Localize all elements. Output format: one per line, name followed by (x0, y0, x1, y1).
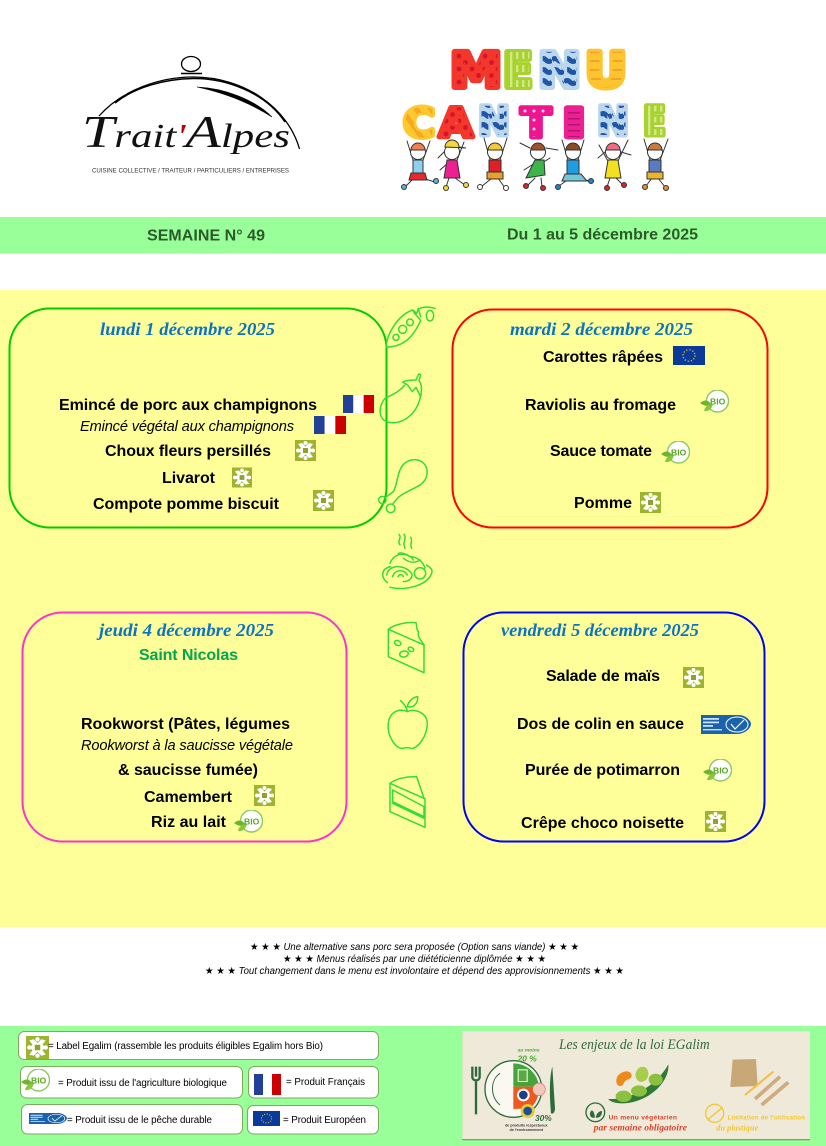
icon: eggplant (380, 374, 421, 423)
logo tagline: CUISINE COLLECTIVE / TRAITEUR / PARTICULIERS / ENTREPRISES (92, 168, 290, 174)
heading: lundi: lundi 1 décembre 2025 (100, 319, 275, 339)
week band (0, 217, 826, 254)
icon: apple (388, 697, 427, 748)
plate chart (472, 1048, 555, 1132)
dish: Livarot: Livarot (162, 470, 216, 487)
icon: Egalim label (313, 490, 334, 511)
icon: Egalim label (254, 785, 275, 806)
footnote lines (205, 942, 624, 977)
dish: saucisse fumée: & saucisse fumée) (118, 762, 258, 779)
plastic limitation illustration: Limitation de l'utilisation (728, 1115, 805, 1121)
dish: Compote: Compote pomme biscuit (93, 496, 280, 513)
legend: sustainable fishing: = Produit issu de le pêche durable (67, 1115, 213, 1126)
icon: cheese (388, 623, 424, 673)
dish: Camembert: Camembert (144, 789, 233, 806)
icon: MSC label (701, 715, 751, 734)
icon: chicken drumstick (379, 460, 427, 513)
dish: Emincé de porc: Emincé de porc aux champignons (59, 397, 317, 414)
dish: Rookworst végétale: Rookworst à la saucisse végétale (81, 738, 293, 754)
legend: bio: BIO (31, 1076, 47, 1086)
icon: spaghetti plate (383, 534, 432, 588)
title letters: MENU: E (503, 43, 533, 99)
title letters: MENU (450, 43, 627, 99)
footnote lines: ★ ★ ★ Tout changement dans le menu est involontaire et dépend des approvisionnements ★ ★ ★ (205, 966, 624, 977)
pea pod illustration: par semaine obligatoire (593, 1122, 687, 1132)
dish: Emincé végétal: Emincé végétal aux champignons (80, 419, 294, 435)
image: menu cantine (402, 43, 668, 190)
icon: bio label: BIO (244, 816, 260, 826)
dish: Dos de colin: Dos de colin en sauce (517, 716, 684, 733)
icon: French flag (314, 416, 346, 434)
image: les enjeux de la loi EGalim (462, 1031, 810, 1140)
plate chart: 20 % (517, 1054, 537, 1064)
logo: Trait'Alpes (82, 56, 300, 174)
yellow menu background (0, 290, 826, 927)
icon: bio label: BIO (710, 396, 726, 406)
title letters: CANTINE: I (562, 101, 586, 147)
icon: bio label: BIO (671, 448, 687, 458)
panel: jeudi (22, 612, 346, 842)
icon: bio label: BIO (713, 766, 729, 776)
plastic limitation illustration (706, 1059, 805, 1132)
legend: Egalim: = Label Egalim (rassemble les produits éligibles Egalim hors Bio) (48, 1041, 323, 1052)
footnote lines: ★ ★ ★ Menus réalisés par une diététicienne diplômée ★ ★ ★ (283, 954, 546, 965)
dish: Crêpe: Crêpe choco noisette (521, 815, 684, 832)
dish: Pomme: Pomme (574, 495, 632, 512)
title letters: MENU: N (538, 43, 581, 99)
image title: Les enjeux de la loi EGalim (558, 1037, 710, 1053)
week dates: Du 1 au 5 décembre 2025 (507, 226, 698, 244)
footnote lines: ★ ★ ★ Une alternative sans porc sera proposée (Option sans viande) ★ ★ ★ (250, 942, 579, 953)
icon: cake slice (390, 777, 425, 827)
icon: Egalim label (640, 492, 661, 513)
title letters: CANTINE: N (478, 99, 510, 145)
bottom legend band (0, 1026, 826, 1146)
icon: Egalim label (295, 440, 316, 461)
plate chart: de l'environnement (510, 1128, 544, 1132)
panel: vendredi (464, 612, 764, 842)
dish: Raviolis: Raviolis au fromage (525, 397, 676, 414)
icon: bio label (661, 441, 690, 463)
plate chart: au moins (518, 1048, 540, 1054)
dish: Purée: Purée de potimarron (525, 762, 680, 779)
dish: Riz au lait: Riz au lait (151, 814, 227, 831)
legend: European product (248, 1106, 378, 1134)
icon: EU flag (673, 346, 705, 365)
dish: Salade: Salade de maïs (546, 668, 660, 685)
title letters: CANTINE: C (403, 101, 435, 147)
subtitle: Saint Nicolas: Saint Nicolas (139, 647, 238, 664)
icon: Egalim label (683, 667, 704, 688)
dish: Rookworst: Rookworst (Pâtes, légumes (81, 716, 290, 733)
icon: cloche dome (99, 56, 300, 149)
legend: bio (20, 1066, 242, 1098)
title letters: CANTINE: N (597, 99, 629, 145)
legend: French product: = Produit Français (286, 1077, 365, 1088)
legend: French product (248, 1066, 378, 1098)
children illustration (402, 138, 668, 190)
title letters: CANTINE: T (521, 101, 552, 147)
title letters: CANTINE: A (439, 101, 473, 147)
heading: jeudi: jeudi 4 décembre 2025 (96, 620, 274, 640)
icon: Egalim label (705, 811, 726, 832)
icon: bio label (703, 759, 732, 781)
dish: Carottes: Carottes râpées (543, 349, 663, 366)
dish: Choux fleurs: Choux fleurs persillés (105, 443, 271, 460)
week number: SEMAINE N° 49 (147, 228, 265, 244)
panel: mardi (452, 310, 768, 528)
title letters: MENU: M (450, 43, 502, 99)
title letters: MENU: U (585, 43, 627, 99)
dish: Sauce tomate: Sauce tomate (550, 443, 652, 460)
icon: Egalim label (232, 468, 252, 488)
panel: lundi (10, 308, 386, 528)
heading: mardi: mardi 2 décembre 2025 (510, 319, 693, 339)
logo wordmark: Trait 'Alpes (82, 106, 290, 157)
icon: bio label (234, 810, 262, 832)
heading: vendredi: vendredi 5 décembre 2025 (501, 620, 699, 640)
title letters: CANTINE: E (643, 99, 666, 145)
pea pod illustration (586, 1064, 687, 1132)
legend: Egalim (18, 1032, 378, 1060)
icon: French flag (343, 395, 374, 413)
legend: bio: = Produit issu de l'agriculture biologique (58, 1078, 228, 1089)
icon: bio label (700, 390, 728, 412)
plate chart: de produits respectueux (505, 1124, 548, 1128)
pea pod illustration: Un menu végétarien (609, 1114, 677, 1121)
icon: pea pod (386, 307, 435, 347)
title letters: CANTINE (403, 99, 666, 147)
legend: European product: = Produit Européen (283, 1115, 366, 1126)
plate chart: 30% (535, 1113, 552, 1123)
legend: sustainable fishing (22, 1104, 242, 1134)
plastic limitation illustration: du plastique (716, 1123, 758, 1132)
